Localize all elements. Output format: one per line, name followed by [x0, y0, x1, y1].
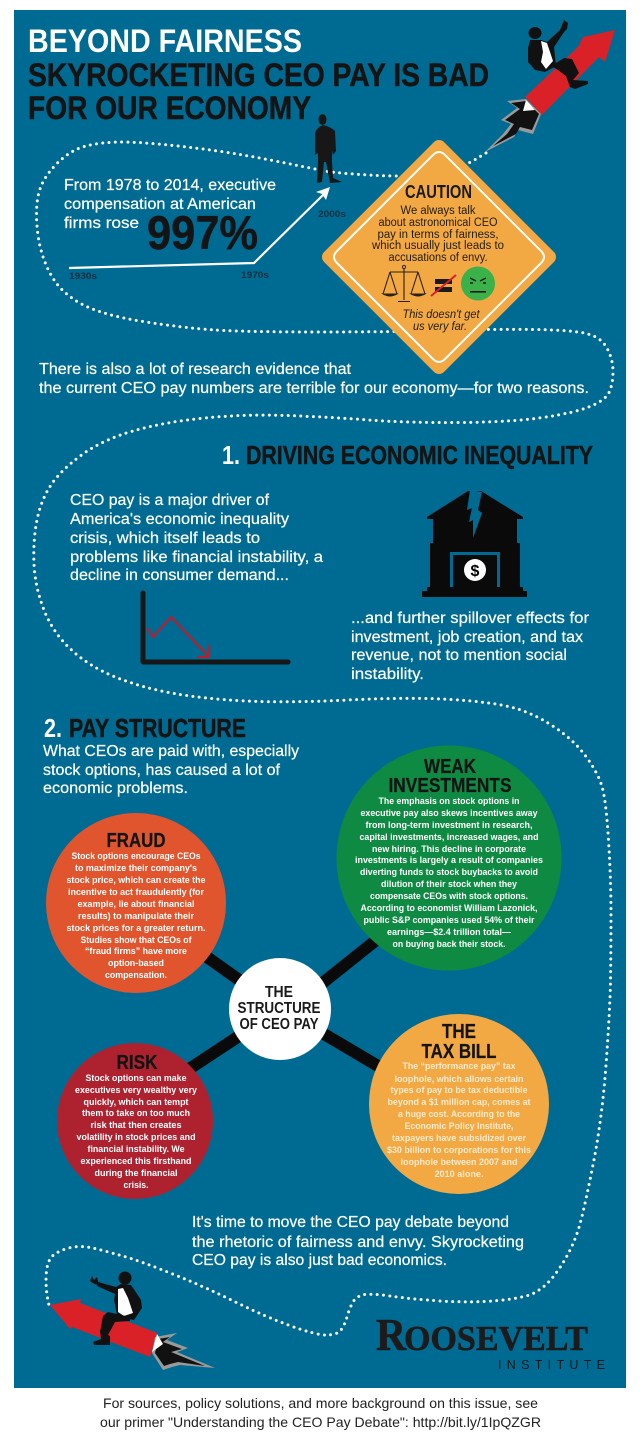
caution conclusion — [402, 309, 480, 333]
chart: declining line — [143, 593, 288, 662]
risk text: crisis. — [124, 1180, 148, 1191]
panel: central structure circle: STRUCTURE — [238, 1000, 321, 1017]
heading: pay structure: 2. — [44, 713, 62, 743]
fraud text: stock price, which can create the — [66, 875, 206, 886]
risk text: quickly, which can tempt — [84, 1097, 189, 1108]
panel: caution sign — [329, 147, 549, 367]
text: conclusion — [192, 1214, 524, 1269]
weak investments text: on buying back their stock. — [392, 939, 506, 950]
risk text: Stock options can make — [86, 1073, 186, 1084]
text: inequality right — [351, 610, 589, 683]
weak investments text: diverting funds to stock buybacks to avoid — [360, 867, 538, 878]
icon: not equal sign — [431, 275, 456, 296]
tax bill text: loophole between 2007 and — [400, 1157, 518, 1168]
weak investments text: earnings—$2.4 trillion total— — [387, 927, 511, 938]
logo: Roosevelt Institute — [376, 1310, 605, 1372]
title: SKYROCKETING CEO PAY IS BAD — [28, 57, 489, 93]
logo: Roosevelt Institute: OOSEVELT — [404, 1319, 588, 1358]
text: executive compensation: firms rose — [64, 215, 139, 232]
weak investments text: According to economist William Lazonick, — [360, 903, 538, 914]
text: executive compensation: From 1978 to 2014, executive — [64, 177, 276, 194]
text: conclusion: It's time to move the CEO pay debate beyond — [192, 1214, 509, 1231]
caution heading: CAUTION — [405, 182, 472, 202]
weak investments text: dilution of their stock when they — [381, 879, 518, 890]
risk text: experienced this firsthand — [80, 1156, 192, 1167]
caution text: which usually just leads to — [371, 240, 504, 252]
icon: CEO riding red rocket (bottom) — [50, 1272, 215, 1370]
risk text: executives very wealthy very — [75, 1085, 198, 1096]
caution conclusion: This doesn't get — [402, 309, 480, 321]
text: inequality left: problems like financial instability, a — [70, 549, 323, 566]
axis label: 1970s: 1970s — [241, 270, 269, 281]
tax bill text: Economic Policy Institute, — [404, 1121, 514, 1132]
panel: weak investments circle — [336, 746, 562, 970]
tax bill text: beyond a $1 million cap, comes at — [388, 1097, 531, 1108]
weak investments text: compensate CEOs with stock options. — [370, 891, 528, 902]
title: BEYOND FAIRNESS — [28, 23, 302, 59]
text: conclusion: CEO pay is also just bad economics. — [192, 1252, 447, 1269]
footer: sources: For sources, policy solutions, and more background on this issue, see — [103, 1395, 538, 1411]
caution text: about astronomical CEO — [378, 217, 498, 229]
text: inequality right: instability. — [351, 666, 424, 683]
risk text — [75, 1073, 198, 1191]
text: research evidence intro: the current CEO pay numbers are terrible for our economy—for two reasons. — [39, 380, 589, 397]
fraud text — [66, 851, 206, 981]
text: research evidence intro: There is also a lot of research evidence that — [39, 361, 352, 378]
fraud text: to maximize their company's — [75, 863, 197, 874]
text: inequality left: America's economic inequality — [70, 511, 289, 528]
panel: weak investments circle: INVESTMENTS — [388, 775, 512, 797]
panel: fraud circle: FRAUD — [106, 830, 166, 852]
panel: fraud circle — [46, 813, 226, 993]
stat: 997%: 997% — [147, 206, 258, 259]
caution conclusion: us very far. — [413, 321, 467, 333]
footer: sources — [100, 1395, 541, 1430]
text: pay structure intro: stock options, has caused a lot of — [43, 762, 281, 779]
panel: weak investments circle: WEAK — [424, 756, 476, 778]
text: inequality left: crisis, which itself leads to — [70, 530, 260, 547]
tax bill text: loophole, which allows certain — [394, 1074, 524, 1085]
axis label: 2000s: 2000s — [318, 209, 346, 220]
text: pay structure intro — [43, 743, 299, 797]
heading: pay structure: PAY STRUCTURE — [69, 713, 246, 743]
text: inequality left: decline in consumer demand... — [70, 567, 289, 584]
tax bill text: types of pay to be tax deductible — [390, 1085, 528, 1096]
panel: risk circle: RISK — [116, 1052, 158, 1074]
weak investments text: from long-term investment in research, — [366, 820, 533, 831]
text: pay structure intro: What CEOs are paid with, especially — [43, 743, 299, 760]
risk text: them to take on too much — [82, 1108, 190, 1119]
text: inequality left — [70, 492, 323, 584]
line chart arrow — [69, 187, 330, 268]
logo: Roosevelt Institute: R — [376, 1310, 406, 1360]
caution text — [371, 205, 504, 264]
risk text: risk that then creates — [90, 1120, 182, 1131]
fraud text: option-based — [108, 958, 164, 969]
axis label: 1930s: 1930s — [69, 271, 97, 282]
weak investments text: The emphasis on stock options in — [378, 796, 520, 807]
icon: CEO riding red rocket (top) — [485, 20, 615, 152]
icon: cracked bank building: $ — [471, 563, 480, 580]
tax bill text — [387, 1061, 531, 1180]
weak investments text: new hiring. This decline in corporate — [372, 844, 526, 855]
tax bill text: 2010 alone. — [434, 1169, 484, 1180]
panel: tax bill circle — [369, 1014, 549, 1194]
text: conclusion: the rhetoric of fairness and envy. Skyrocketing — [192, 1234, 524, 1251]
fraud text: incentive to act fraudulently (for — [68, 887, 204, 898]
risk text: volatility in stock prices and — [76, 1132, 196, 1143]
fraud text: “fraud firms” have more — [85, 946, 187, 957]
text: inequality right: investment, job creation, and tax — [351, 629, 583, 646]
fraud text: stock prices for a greater return. — [66, 923, 206, 934]
text: inequality left: CEO pay is a major driver of — [70, 492, 270, 509]
tax bill text: taxpayers have subsidized over — [392, 1133, 526, 1144]
footer: sources: our primer "Understanding the CEO Pay Debate": http://bit.ly/1IpQZGR — [100, 1414, 541, 1430]
tax bill text: The “performance pay” tax — [402, 1061, 516, 1072]
panel: tax bill circle: THE — [442, 1021, 476, 1043]
panel: central structure circle: THE — [265, 984, 293, 1001]
fraud text: example, lie about financial — [78, 899, 194, 910]
icon: angry green face — [461, 266, 495, 300]
risk text: during the financial — [94, 1168, 178, 1179]
text: research evidence intro — [39, 361, 589, 397]
icon: cracked bank building — [422, 490, 527, 597]
tax bill text: $30 billion to corporations for this — [387, 1145, 531, 1156]
text: executive compensation: compensation at American — [64, 196, 256, 213]
risk text: financial instability. We — [88, 1144, 184, 1155]
dotted rocket trail — [34, 142, 613, 1335]
connector spokes — [180, 933, 400, 1079]
fraud text: compensation. — [105, 970, 167, 981]
text: executive compensation — [64, 177, 276, 232]
title: FOR OUR ECONOMY — [28, 90, 311, 126]
caution text: accusations of envy. — [388, 252, 488, 264]
text: inequality right: revenue, not to mention social — [351, 647, 567, 664]
panel: risk circle — [57, 1043, 213, 1199]
text: pay structure intro: economic problems. — [43, 780, 188, 797]
weak investments text — [355, 796, 543, 950]
weak investments text: capital investments, increased wages, and — [360, 832, 539, 843]
fraud text: Studies show that CEOs of — [80, 935, 192, 946]
heading: driving economic inequality: 1. — [222, 440, 240, 470]
icon: standing CEO silhouette — [315, 114, 342, 183]
tax bill text: a huge cost. According to the — [398, 1109, 520, 1120]
weak investments text: executive pay also skews incentives away — [360, 808, 538, 819]
title — [28, 23, 489, 126]
caution text: pay in terms of fairness, — [378, 229, 498, 241]
weak investments text: investments is largely a result of companies — [355, 855, 543, 866]
panel: central structure circle: OF CEO PAY — [240, 1016, 319, 1033]
panel: central structure circle — [229, 958, 331, 1060]
fraud text: results) to manipulate their — [78, 911, 194, 922]
caution text: We always talk — [400, 205, 476, 217]
icon: scales — [383, 265, 425, 302]
fraud text: Stock options encourage CEOs — [72, 851, 200, 862]
text: inequality right: ...and further spillover effects for — [351, 610, 589, 627]
logo: Roosevelt Institute: INSTITUTE — [498, 1358, 605, 1372]
panel: tax bill circle: TAX BILL — [422, 1041, 496, 1063]
weak investments text: public S&P companies used 54% of their — [364, 915, 535, 926]
